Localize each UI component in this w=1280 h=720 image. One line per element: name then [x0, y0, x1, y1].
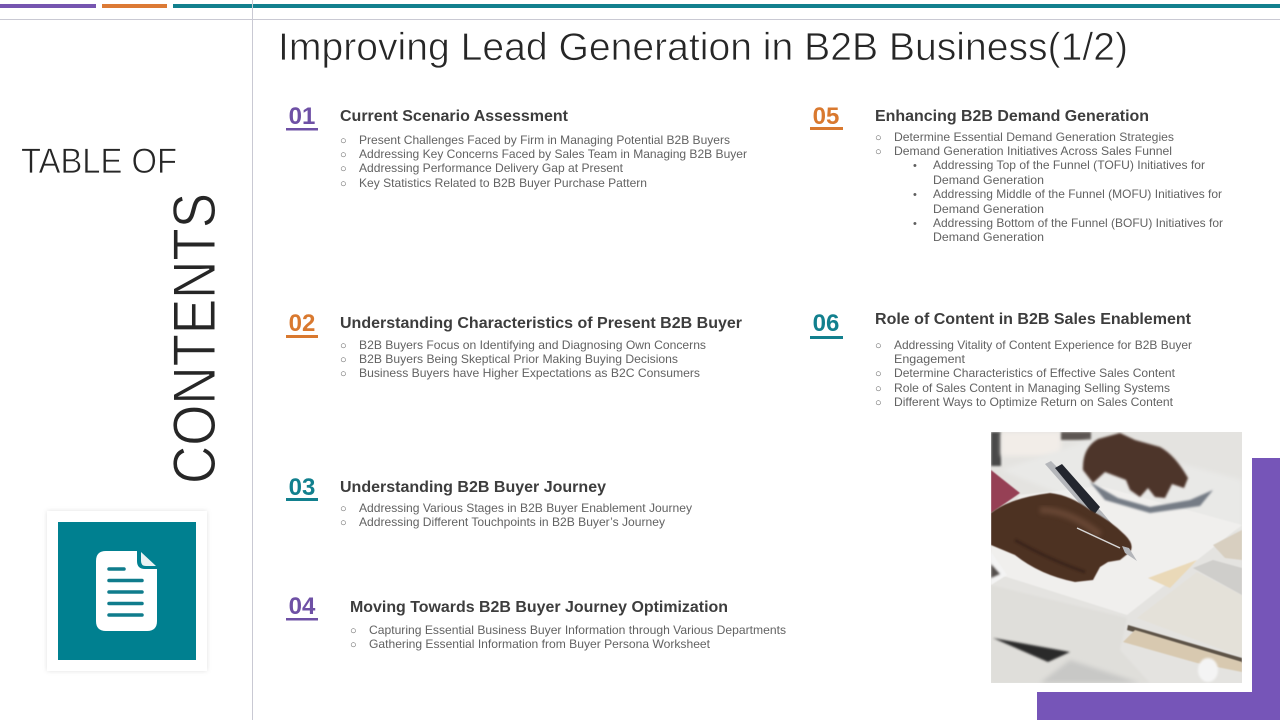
heading 03: Understanding B2B Buyer Journey	[340, 479, 606, 496]
notebook	[1137, 572, 1242, 657]
pen tip	[1122, 546, 1137, 561]
list 04: Capturing Essential Business Buyer Information through Various Departments	[369, 623, 786, 637]
section 03	[286, 474, 692, 529]
list 06: Engagement	[894, 352, 966, 366]
list 03: Addressing Various Stages in B2B Buyer Enablement Journey	[359, 501, 692, 515]
list 05: •	[913, 189, 917, 201]
section 04	[286, 593, 786, 651]
heading 02: Understanding Characteristics of Present B2B Buyer	[340, 315, 742, 332]
heading 06: Role of Content in B2B Sales Enablement	[875, 311, 1192, 328]
top accent bars	[0, 4, 1280, 8]
list 05: Demand Generation	[933, 202, 1044, 216]
small paper stack	[991, 574, 1004, 584]
dark print under rear hand	[1090, 482, 1213, 513]
list 06	[875, 338, 1192, 409]
writing hand	[991, 493, 1132, 582]
background tones	[991, 432, 1001, 466]
sidebar heading: table of: TABLE OF	[21, 142, 177, 181]
list 05: ○	[875, 146, 882, 158]
list 06: ○	[875, 383, 882, 395]
list 04: ○	[350, 639, 357, 651]
heading 05: Enhancing B2B Demand Generation	[875, 108, 1149, 125]
list 05: Demand Generation	[933, 230, 1044, 244]
list 01: Key Statistics Related to B2B Buyer Purchase Pattern	[359, 176, 647, 190]
list 03	[340, 501, 692, 529]
number 03: 03	[289, 474, 315, 501]
list 02: ○	[340, 340, 347, 352]
list 01: ○	[340, 178, 347, 190]
list 02: Business Buyers have Higher Expectations as B2C Consumers	[359, 366, 700, 380]
sticky note and foil	[1148, 560, 1197, 588]
list 06: Role of Sales Content in Managing Selling Systems	[894, 381, 1170, 395]
list 03: ○	[340, 503, 347, 515]
list 02	[340, 338, 706, 380]
list 06: Addressing Vitality of Content Experience for B2B Buyer	[894, 338, 1192, 352]
list 04: ○	[350, 625, 357, 637]
paper	[991, 486, 1242, 615]
heading 01: Current Scenario Assessment	[340, 108, 569, 125]
list 05	[875, 130, 1223, 244]
sleeve	[991, 470, 1020, 513]
list 06: Determine Characteristics of Effective Sales Content	[894, 366, 1176, 380]
list 01: Addressing Performance Delivery Gap at Present	[359, 161, 624, 175]
list 05: •	[913, 218, 917, 230]
lower table	[991, 585, 1150, 683]
number 06: 06	[813, 310, 839, 337]
list 05: Demand Generation Initiatives Across Sales Funnel	[894, 144, 1172, 158]
list 01: ○	[340, 149, 347, 161]
list 01: Addressing Key Concerns Faced by Sales Team in Managing B2B Buyer	[359, 147, 747, 161]
list 05: Addressing Middle of the Funnel (MOFU) Initiatives for	[933, 187, 1222, 201]
list 02: B2B Buyers Being Skeptical Prior Making Buying Decisions	[359, 352, 678, 366]
heading 04: Moving Towards B2B Buyer Journey Optimization	[350, 599, 728, 616]
rear hand	[1083, 433, 1188, 498]
list 01: ○	[340, 163, 347, 175]
section 02	[286, 310, 742, 380]
list 03: ○	[340, 517, 347, 529]
list 01	[340, 133, 747, 190]
list 06: ○	[875, 368, 882, 380]
list 03: Addressing Different Touchpoints in B2B Buyer’s Journey	[359, 515, 665, 529]
list 06: ○	[875, 340, 882, 352]
list 05: •	[913, 160, 917, 172]
list 06: Different Ways to Optimize Return on Sales Content	[894, 395, 1174, 409]
list 05: Addressing Bottom of the Funnel (BOFU) Initiatives for	[933, 216, 1223, 230]
icon: document on teal tile	[47, 511, 207, 671]
list 05: Determine Essential Demand Generation Strategies	[894, 130, 1174, 144]
list 01: Present Challenges Faced by Firm in Managing Potential B2B Buyers	[359, 133, 730, 147]
purple corner frame	[1037, 458, 1280, 720]
list 05: ○	[875, 132, 882, 144]
list 05: Demand Generation	[933, 173, 1044, 187]
list 02: B2B Buyers Focus on Identifying and Diagnosing Own Concerns	[359, 338, 706, 352]
list 01: ○	[340, 135, 347, 147]
list 06: ○	[875, 397, 882, 409]
list 02: ○	[340, 354, 347, 366]
section 01	[286, 103, 747, 190]
title: Improving Lead Generation in B2B Business(1/2)	[278, 26, 1128, 69]
photo: hands writing on paper	[991, 432, 1242, 683]
number 04: 04	[289, 593, 316, 620]
number 05: 05	[813, 103, 839, 130]
list 05: Addressing Top of the Funnel (TOFU) Initiatives for	[933, 158, 1205, 172]
list 04	[350, 623, 786, 651]
list 04: Gathering Essential Information from Buyer Persona Worksheet	[369, 637, 711, 651]
section 05	[810, 103, 1223, 244]
number 01: 01	[289, 103, 315, 130]
pen	[1045, 461, 1112, 524]
sidebar heading: contents: CONTENTS	[161, 193, 228, 484]
number 02: 02	[289, 310, 315, 337]
list 02: ○	[340, 368, 347, 380]
section 06	[810, 310, 1192, 409]
